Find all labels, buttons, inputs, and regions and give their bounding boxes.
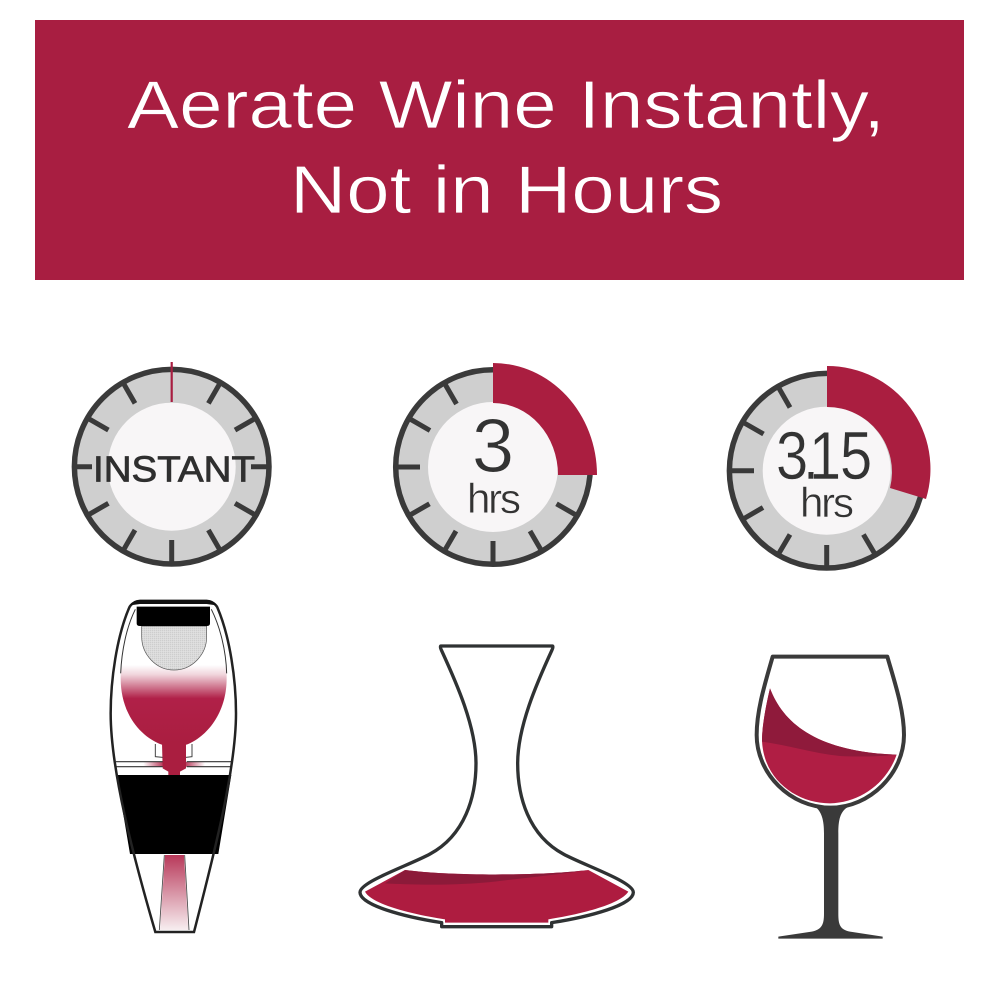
title banner (35, 20, 964, 280)
aerator body outline (111, 601, 236, 932)
aerator neck (162, 743, 186, 775)
glass stem and foot (778, 807, 883, 939)
glass wine shadow (762, 688, 897, 757)
top rim (130, 600, 217, 605)
aerator bulb of wine (121, 665, 227, 745)
label: 3.15: 3.15 (776, 419, 872, 494)
title line 2: Not in Hours (290, 152, 723, 228)
glass bowl outline (757, 657, 904, 808)
title line 1: Aerate Wine Instantly, (127, 67, 885, 143)
red wedge: 3.15 hours (827, 366, 930, 499)
glass wine (762, 688, 897, 803)
black sleeve (117, 775, 231, 854)
spout stream (160, 855, 188, 930)
decanter wine shadow (385, 870, 588, 885)
timer: 3.15 hrs (729, 366, 930, 568)
illustration: wine glass (757, 657, 904, 939)
black cap (137, 607, 210, 626)
timer: instant (74, 362, 269, 564)
decanter outline (360, 646, 633, 927)
illustration: decanter (360, 646, 633, 927)
red wedge: 3 hours (493, 363, 597, 475)
band lines (116, 762, 232, 767)
timer: 3 hrs (396, 363, 597, 564)
mesh filter (142, 626, 207, 670)
red needle (171, 362, 173, 402)
decanter wine (365, 870, 628, 923)
wine bars (143, 762, 163, 767)
label: hrs: hrs (467, 475, 521, 522)
inner wall lines (121, 609, 227, 673)
label: instant: INSTANT (93, 448, 255, 490)
illustration: wine aerator (111, 600, 236, 932)
label: hrs: hrs (800, 479, 854, 526)
label: 3: 3 (472, 404, 514, 489)
